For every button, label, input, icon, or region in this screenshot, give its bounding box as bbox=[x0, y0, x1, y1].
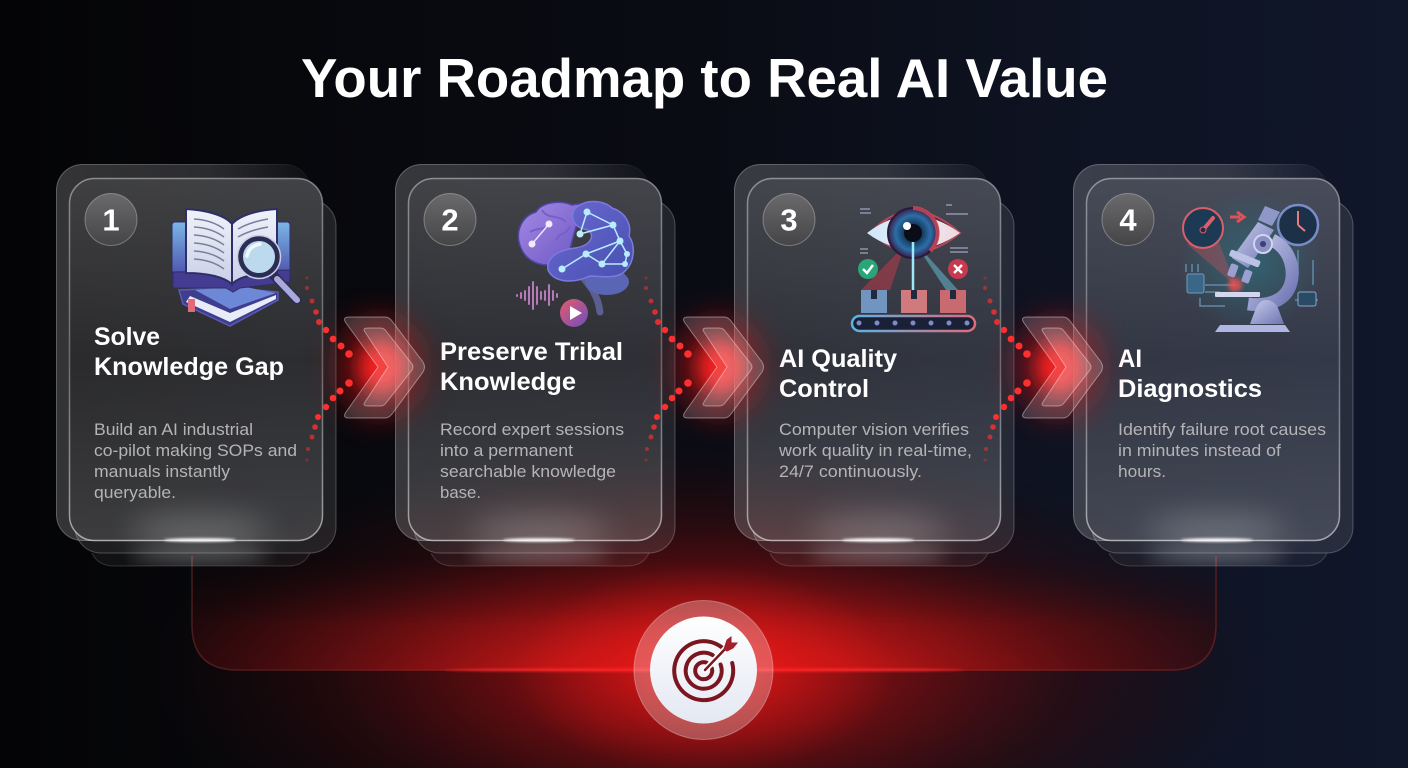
number badge 2: 2 bbox=[441, 202, 459, 238]
number badge 1 bbox=[85, 194, 137, 246]
description 3: work quality in real-time, bbox=[778, 441, 972, 460]
heading: AI Diagnostics bbox=[1118, 345, 1262, 403]
description 4 bbox=[1118, 420, 1326, 481]
heading: AI Quality Control: AI Quality bbox=[779, 345, 897, 373]
arrow: step 1 to step 2 bbox=[305, 276, 424, 462]
number badge 3 bbox=[763, 194, 815, 246]
description 1 bbox=[94, 420, 297, 502]
description 4: Identify failure root causes bbox=[1118, 420, 1326, 439]
heading: AI Diagnostics: AI bbox=[1118, 345, 1142, 373]
description 2: Record expert sessions bbox=[440, 420, 624, 439]
glass card stack 4 bbox=[1074, 164, 1353, 566]
icon: brain with network, waveform and play button bbox=[517, 202, 633, 327]
heading: Solve Knowledge Gap: Solve bbox=[94, 323, 160, 351]
description 3: 24/7 continuously. bbox=[779, 462, 922, 481]
heading: Solve Knowledge Gap bbox=[94, 323, 284, 381]
description 3 bbox=[778, 420, 972, 481]
number badge 1: 1 bbox=[102, 202, 120, 238]
goal: target icon on glowing circle bbox=[514, 565, 894, 768]
heading: Preserve Tribal Knowledge bbox=[440, 338, 623, 396]
panel: step 2 bbox=[396, 164, 675, 566]
icon: open book with magnifier bbox=[172, 209, 297, 326]
arrow: step 2 to step 3 bbox=[644, 276, 764, 462]
title: Your Roadmap to Real AI Value bbox=[301, 47, 1108, 109]
glass card stack 1 bbox=[56, 164, 336, 566]
description 2: base. bbox=[440, 483, 481, 502]
glass card stack 2 bbox=[396, 164, 675, 566]
description 2 bbox=[440, 420, 624, 502]
description 4: hours. bbox=[1118, 462, 1166, 481]
arrow: step 3 to step 4 bbox=[983, 276, 1102, 462]
description 1: co-pilot making SOPs and bbox=[94, 441, 297, 460]
heading: AI Quality Control: Control bbox=[779, 375, 869, 403]
panel: step 1 bbox=[56, 164, 336, 566]
description 2: into a permanent bbox=[440, 441, 573, 460]
panel: step 4 bbox=[1074, 164, 1353, 566]
connector bracket linking the cards to the goal bbox=[192, 556, 1216, 672]
number badge 3: 3 bbox=[780, 202, 798, 238]
description 4: in minutes instead of bbox=[1118, 441, 1281, 460]
icon: target with dart bbox=[674, 637, 737, 700]
description 1: Build an AI industrial bbox=[94, 420, 253, 439]
number badge 4: 4 bbox=[1119, 202, 1137, 238]
heading: Preserve Tribal Knowledge: Preserve Tribal bbox=[440, 338, 623, 366]
icon: eye scanning boxes on a conveyor bbox=[852, 205, 975, 331]
glass card stack 3 bbox=[734, 164, 1014, 566]
icon: microscope with gauge and clock bbox=[1178, 192, 1322, 332]
description 1: manuals instantly bbox=[94, 462, 231, 481]
number badge 2 bbox=[424, 194, 476, 246]
heading: Solve Knowledge Gap: Knowledge Gap bbox=[94, 353, 284, 381]
number badge 4 bbox=[1102, 194, 1154, 246]
description 2: searchable knowledge bbox=[440, 462, 616, 481]
description 3: Computer vision verifies bbox=[779, 420, 969, 439]
heading: AI Diagnostics: Diagnostics bbox=[1118, 375, 1262, 403]
heading: Preserve Tribal Knowledge: Knowledge bbox=[440, 368, 576, 396]
panel: step 3 bbox=[734, 164, 1014, 566]
heading: AI Quality Control bbox=[779, 345, 897, 403]
description 1: queryable. bbox=[94, 483, 176, 502]
